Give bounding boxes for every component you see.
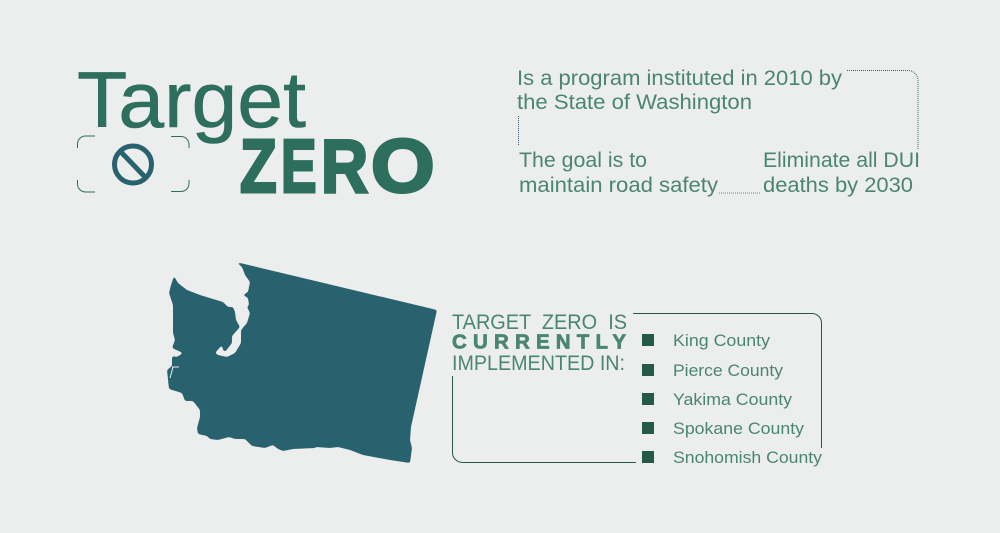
title word: ZERO: E: [281, 124, 316, 208]
label: Pierce County: Pierce County: [673, 361, 784, 380]
icon: prohibition sign in corner brackets: [78, 136, 189, 192]
map: Washington State: [167, 262, 437, 463]
county list frame: [452, 314, 822, 462]
title word: ZERO: Z: [240, 124, 277, 208]
text: state of Washington: the State of Washington: [517, 91, 752, 114]
bullet: Snohomish County: [642, 451, 654, 463]
label: Snohomish County: Snohomish County: [673, 448, 823, 467]
icon: prohibition circle: [114, 146, 152, 183]
text: eliminate line two: deaths by 2030: [763, 174, 913, 197]
map detail: coastal inlet: [170, 367, 179, 378]
text block: program description: [517, 67, 920, 197]
text: eliminate line one: Eliminate all DUI: [763, 149, 920, 172]
bullet: King County: [642, 334, 654, 346]
heading line two: currently: CURRENTLY: [452, 330, 626, 354]
county list: [642, 331, 823, 467]
heading: Target Zero is currently implemented in: [452, 311, 627, 375]
bullet: Yakima County: [642, 393, 654, 405]
text: goal line one: The goal is to: [519, 149, 647, 172]
label: Spokane County: Spokane County: [673, 419, 805, 438]
title word: ZERO: O: [371, 124, 435, 208]
dotted connector lines: [518, 70, 918, 193]
text: program origin: Is a program instituted in 2010 by: [517, 67, 843, 90]
bullet: Spokane County: [642, 422, 654, 434]
text: goal line two: maintain road safety: [519, 174, 719, 197]
label: Yakima County: Yakima County: [673, 390, 793, 409]
title word: ZERO: R: [321, 124, 368, 208]
bullet: Pierce County: [642, 364, 654, 376]
icon frame: corner brackets: [78, 136, 189, 192]
title word: ZERO: [240, 124, 435, 208]
heading line three: IMPLEMENTED IN:: [452, 352, 625, 375]
heading line one: TARGET ZERO IS: [452, 311, 627, 334]
label: King County: King County: [673, 331, 771, 350]
title word: Target: Target: [77, 55, 306, 144]
